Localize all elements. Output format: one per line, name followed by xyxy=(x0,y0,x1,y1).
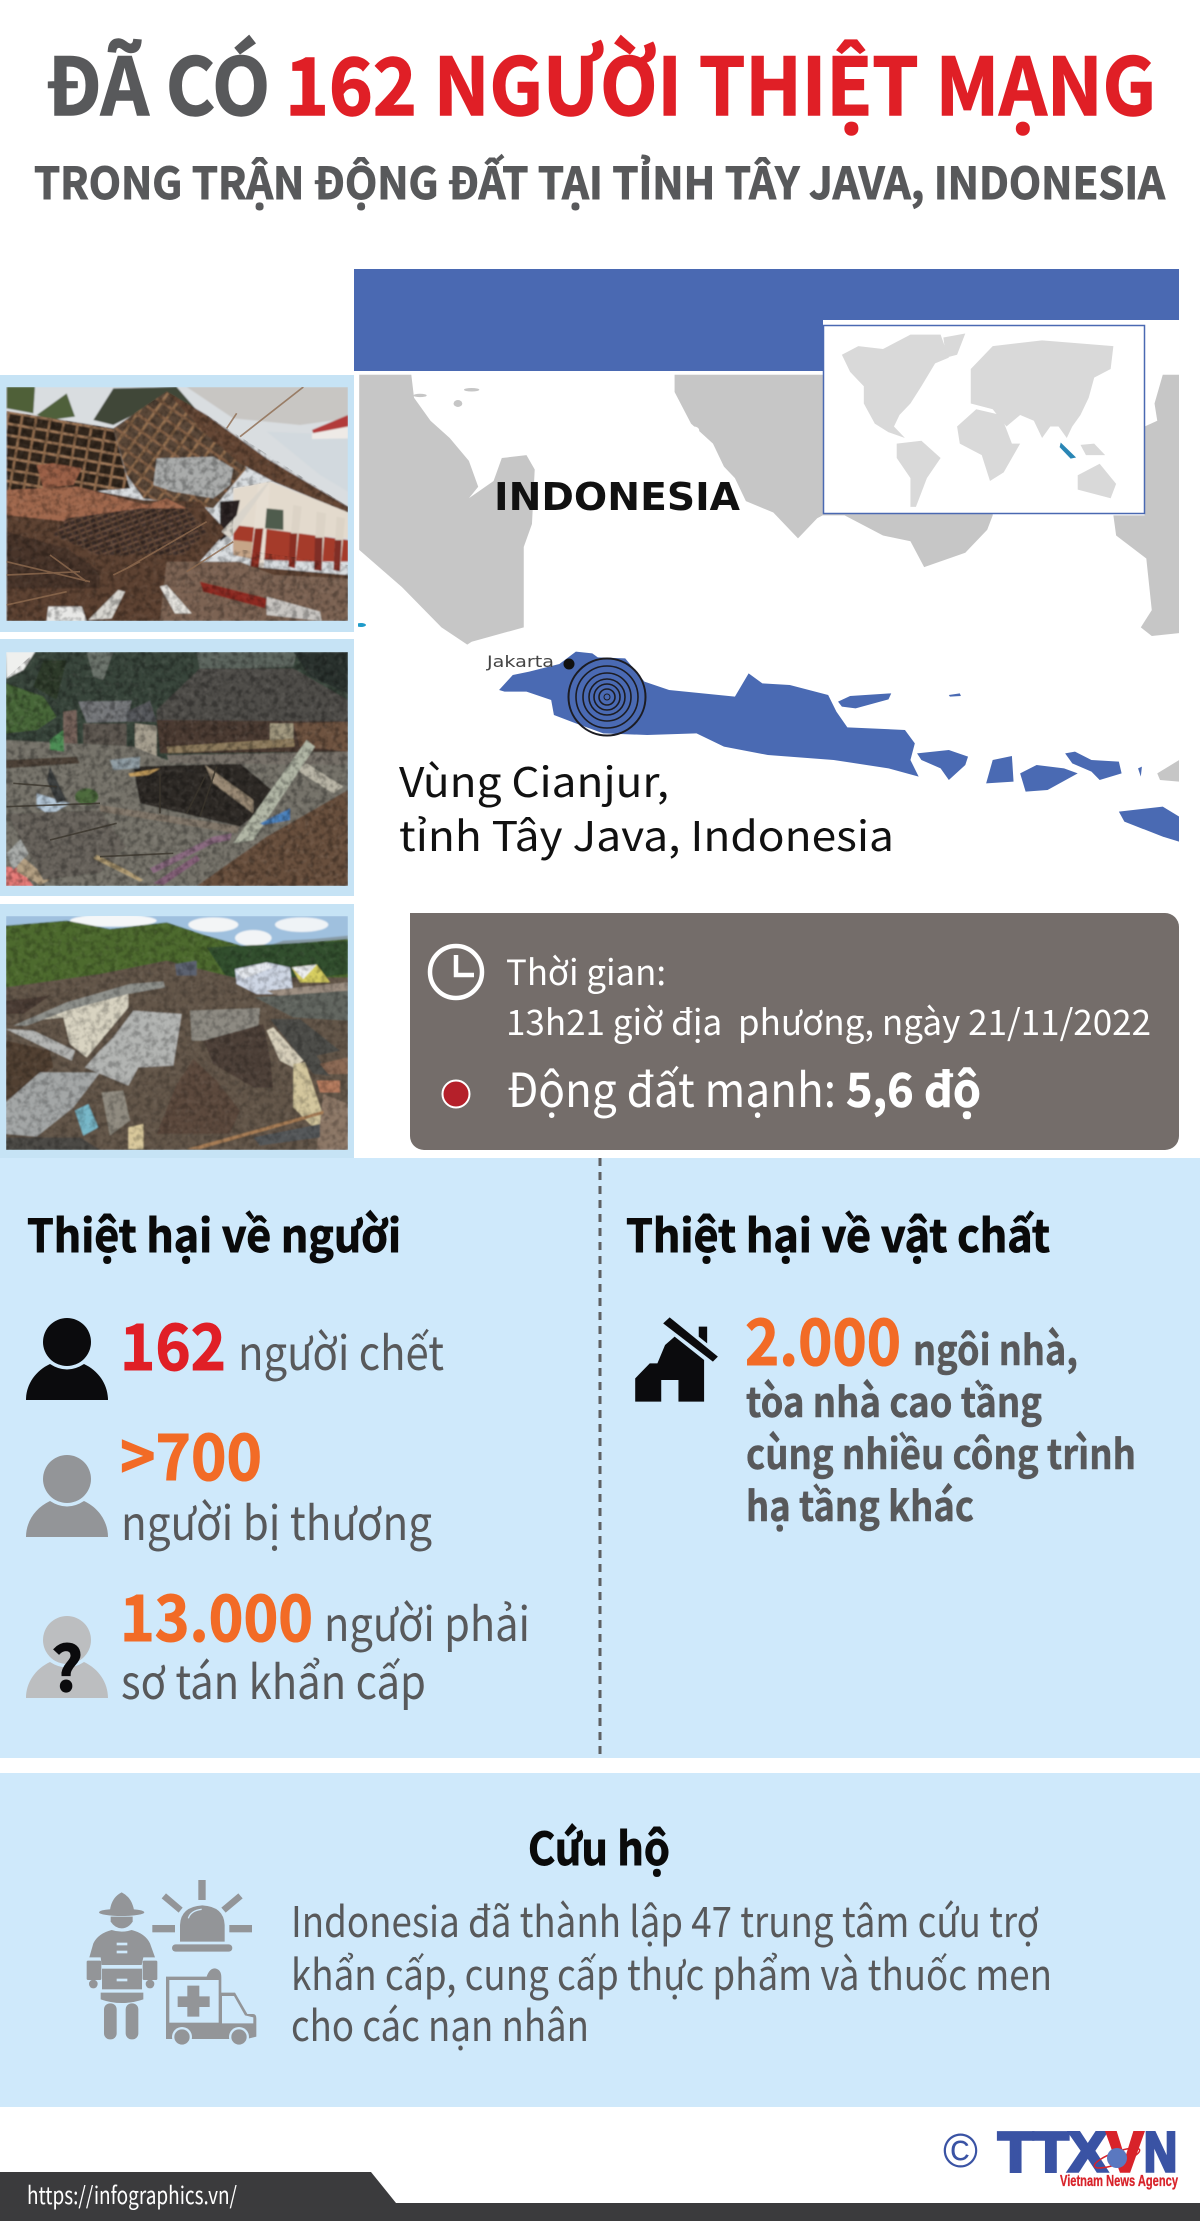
map header band xyxy=(354,269,1179,371)
photo 1: collapsed school xyxy=(0,375,354,632)
map: Indonesia and West Java xyxy=(354,269,1179,842)
stat: 2000 houses: hạ tầng khác xyxy=(746,1473,974,1533)
stat: 162 dead: người chết xyxy=(238,1315,444,1384)
text: magnitude: Động đất mạnh: xyxy=(507,1052,836,1121)
map caption: location xyxy=(399,749,894,863)
siren xyxy=(152,1880,252,1952)
icon: firefighter, siren and ambulance xyxy=(87,1880,256,2047)
map caption: location: tỉnh Tây Java, Indonesia xyxy=(399,803,894,863)
stat: 162 dead: 162 xyxy=(120,1297,226,1389)
map landmasses xyxy=(356,375,1179,842)
stat: 13000 evacuated: sơ tán khẩn cấp xyxy=(121,1644,426,1713)
stat: 13000 evacuated: người phải xyxy=(324,1586,530,1655)
text: rescue details: cho các nạn nhân xyxy=(291,1993,589,2054)
stat: 13000 evacuated xyxy=(120,1568,530,1713)
panel: rescue xyxy=(0,1773,1200,2107)
panel: damage statistics xyxy=(0,1158,1200,1758)
stat: 162 dead xyxy=(120,1297,444,1389)
icon: Jakarta dot xyxy=(564,658,574,670)
stat: 2000 houses xyxy=(745,1292,1136,1533)
stat: over 700 injured: người bị thương xyxy=(121,1485,432,1554)
photo 2: crushed houses under thatch roof xyxy=(0,639,354,896)
stat: over 700 injured: >700 xyxy=(120,1407,262,1499)
text: rescue details: Indonesia đã thành lập 47 trung tâm cứu trợ xyxy=(291,1889,1039,1950)
stat: over 700 injured xyxy=(120,1407,432,1554)
map label: Jakarta: Jakarta xyxy=(486,652,554,671)
text: rescue details xyxy=(291,1889,1052,2054)
inset: world locator map xyxy=(824,326,1144,514)
text: magnitude: 5,6 độ xyxy=(846,1052,981,1121)
stat: 13000 evacuated: 13.000 xyxy=(120,1568,313,1660)
icon: person grey xyxy=(26,1455,108,1537)
firefighter xyxy=(87,1892,157,2039)
logo: TTXVN: V xyxy=(1107,2120,1143,2183)
heading: material damage: Thiệt hại về vật chất xyxy=(626,1200,1050,1265)
logo: TTXVN: © xyxy=(943,2125,978,2178)
footer url: https://infographics.vn/ xyxy=(27,2176,237,2211)
icon: earthquake epicenter rings xyxy=(568,658,646,736)
ambulance xyxy=(166,1968,256,2047)
icon: person black xyxy=(26,1318,108,1400)
stat: 2000 houses: cùng nhiều công trình xyxy=(746,1421,1136,1481)
map caption: location: Vùng Cianjur, xyxy=(399,749,669,809)
logo: TTXVN xyxy=(943,2120,1178,2190)
icon: damaged house xyxy=(635,1317,718,1402)
subtitle: TRONG TRẬN ĐỘNG ĐẤT TẠI TỈNH TÂY JAVA, INDONESIA xyxy=(34,148,1166,212)
text: time of quake: 13h21 giờ địa phương, ngày 21/11/2022 xyxy=(506,995,1151,1046)
icon: clock xyxy=(430,946,482,998)
icon: person with question mark xyxy=(26,1616,108,1709)
stat: 2000 houses: tòa nhà cao tầng xyxy=(746,1369,1042,1429)
title: main headline: 162 NGƯỜI THIỆT MẠNG xyxy=(285,23,1156,138)
panel: photos of earthquake damage xyxy=(0,375,354,1160)
logo: TTXVN: N xyxy=(1144,2120,1177,2183)
photo 3: destroyed village below hills xyxy=(0,904,354,1160)
map label: Indonesia: INDONESIA xyxy=(494,475,741,519)
icon: red dot xyxy=(442,1080,470,1108)
text: time of quake: Thời gian: xyxy=(506,945,666,996)
stat: 2000 houses: ngôi nhà, xyxy=(913,1317,1078,1377)
text: time of quake xyxy=(506,945,1151,1046)
panel: earthquake time and magnitude xyxy=(410,913,1179,1150)
map: Java and Lesser Sunda islands highlighted xyxy=(499,652,1179,842)
icon: person with question mark: ? xyxy=(51,1619,83,1709)
stat: 2000 houses: 2.000 xyxy=(745,1292,901,1384)
heading: rescue: Cứu hộ xyxy=(528,1813,670,1878)
text: rescue details: khẩn cấp, cung cấp thực phẩm và thuốc men xyxy=(291,1942,1052,2003)
logo: TTXVN: TTX xyxy=(998,2120,1107,2183)
title: main headline: ĐÃ CÓ xyxy=(46,23,270,138)
footer bar xyxy=(0,2172,1200,2221)
heading: human damage: Thiệt hại về người xyxy=(27,1200,401,1265)
